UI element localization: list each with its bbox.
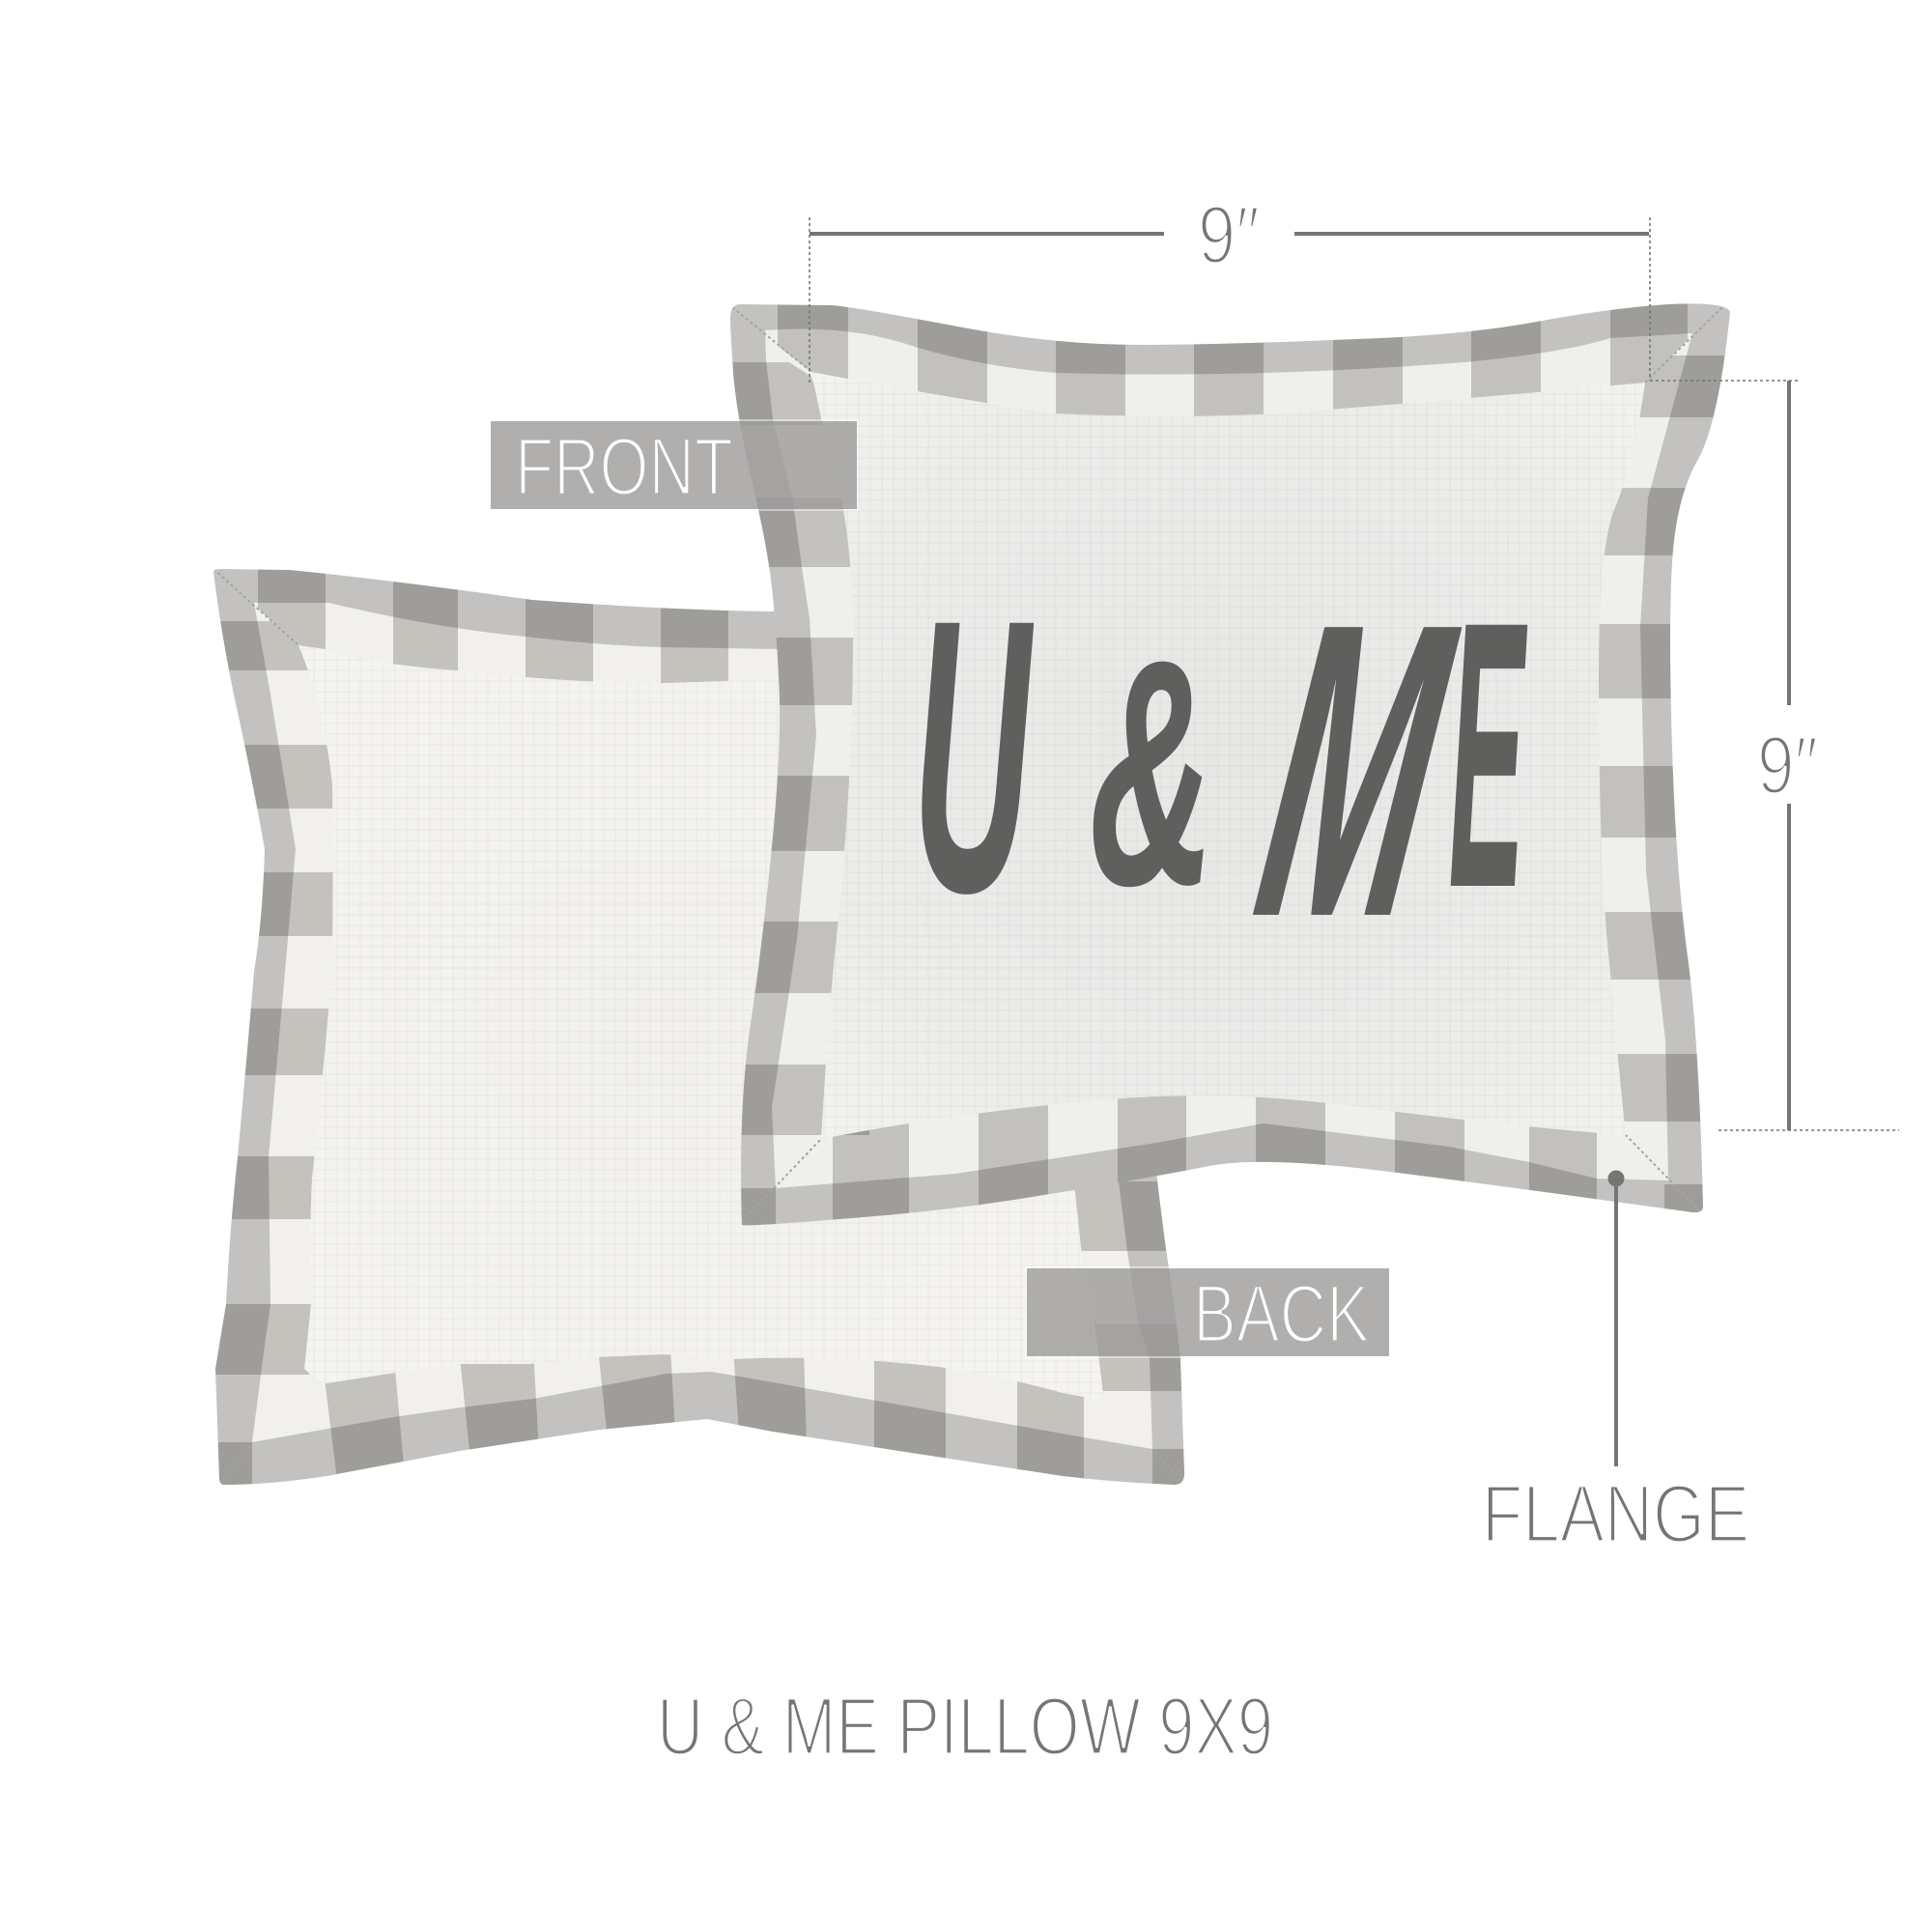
back flange gingham [213, 569, 1184, 1485]
pillow: front [715, 290, 1748, 1246]
height dimension: 9 inch: 9″ [1757, 720, 1818, 810]
label: BACK [1025, 1266, 1391, 1359]
width dimension: 9 inch [810, 189, 1650, 383]
callout: FLANGE: FLANGE [1482, 1468, 1749, 1559]
width dimension: 9 inch: 9″ [1198, 189, 1260, 280]
label: BACK: BACK [1193, 1268, 1370, 1359]
pillow lettering: U & ME: E [1449, 545, 1528, 966]
pillow lettering: U & ME: M [1236, 538, 1477, 1002]
label: FRONT: FRONT [515, 421, 733, 512]
pillow lettering: U & ME [913, 538, 1528, 1002]
title: U & ME PILLOW 9X9 [657, 1681, 1273, 1772]
pillow lettering: U & ME: U [913, 541, 1035, 973]
callout: FLANGE [1482, 1171, 1749, 1559]
front flange gingham [715, 290, 1748, 1246]
pillow: back [213, 569, 1184, 1485]
height dimension: 9 inch [1650, 381, 1899, 1130]
front waffle body [811, 372, 1645, 1139]
back waffle body [298, 645, 1104, 1401]
pillow lettering: U & ME: & [1090, 596, 1214, 952]
